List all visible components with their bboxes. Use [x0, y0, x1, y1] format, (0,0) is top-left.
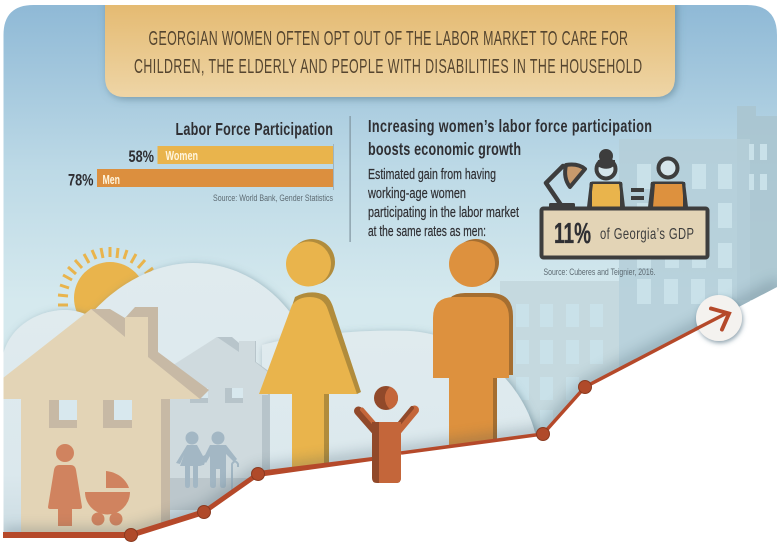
- title banner: [105, 0, 675, 97]
- title banner: CHILDREN, THE ELDERLY AND PEOPLE WITH DISABILITIES IN THE HOUSEHOLD: [134, 55, 642, 78]
- icon: woman figure: [259, 239, 361, 484]
- trend line: [3, 314, 725, 542]
- text block: economic growth: Estimated gain from having: [368, 166, 496, 183]
- house: main beige home: [3, 307, 209, 540]
- icon: woman at desk: [587, 149, 625, 208]
- bar: women: Women: [166, 148, 198, 163]
- source: Source: Cuberes and Teignier, 2016.: [544, 267, 656, 278]
- icon: elderly couple: [176, 432, 238, 490]
- bar: men: [68, 169, 333, 190]
- heading: Labor Force Participation: [176, 120, 333, 140]
- icon: sun: [58, 247, 154, 314]
- icon: baby stroller: [85, 471, 130, 526]
- shadow along the trend line: [3, 285, 780, 535]
- background buildings: [500, 106, 777, 459]
- text block: economic growth: working-age women: [367, 185, 466, 202]
- text block: economic growth: [367, 117, 652, 240]
- GDP box: of Georgia’s GDP: [600, 224, 694, 242]
- hills: [3, 263, 536, 545]
- icon: mother: [48, 444, 82, 526]
- text block: economic growth: boosts economic growth: [368, 140, 521, 160]
- panel: labor force participation chart: [68, 120, 334, 204]
- title banner: GEORGIAN WOMEN OFTEN OPT OUT OF THE LABOR MARKET TO CARE FOR: [148, 27, 628, 50]
- arrow head in circle: [695, 295, 742, 341]
- chart nodes: [124, 380, 592, 542]
- text block: economic growth: participating in the labor market: [368, 204, 520, 221]
- house: grey neighbour: [170, 337, 270, 510]
- icon: child with raised arms: [358, 386, 414, 483]
- icon: desk lamp: [546, 164, 585, 208]
- GDP box: 11%: [554, 218, 591, 250]
- text block: economic growth: at the same rates as men:: [368, 223, 486, 240]
- icon: man figure: [433, 239, 513, 448]
- icon: man at desk: [648, 158, 688, 208]
- text block: economic growth: Increasing women’s labor force participation: [368, 117, 652, 137]
- bar: men: 78%: [68, 170, 94, 190]
- source: Source: World Bank, Gender Statistics: [213, 193, 333, 204]
- bar: women: 58%: [128, 147, 154, 166]
- bar: women: [128, 146, 333, 166]
- panel: GDP desk icon: [542, 149, 708, 278]
- icon: equals sign: [631, 188, 644, 200]
- bar: men: Men: [102, 172, 120, 187]
- GDP box: [542, 208, 708, 258]
